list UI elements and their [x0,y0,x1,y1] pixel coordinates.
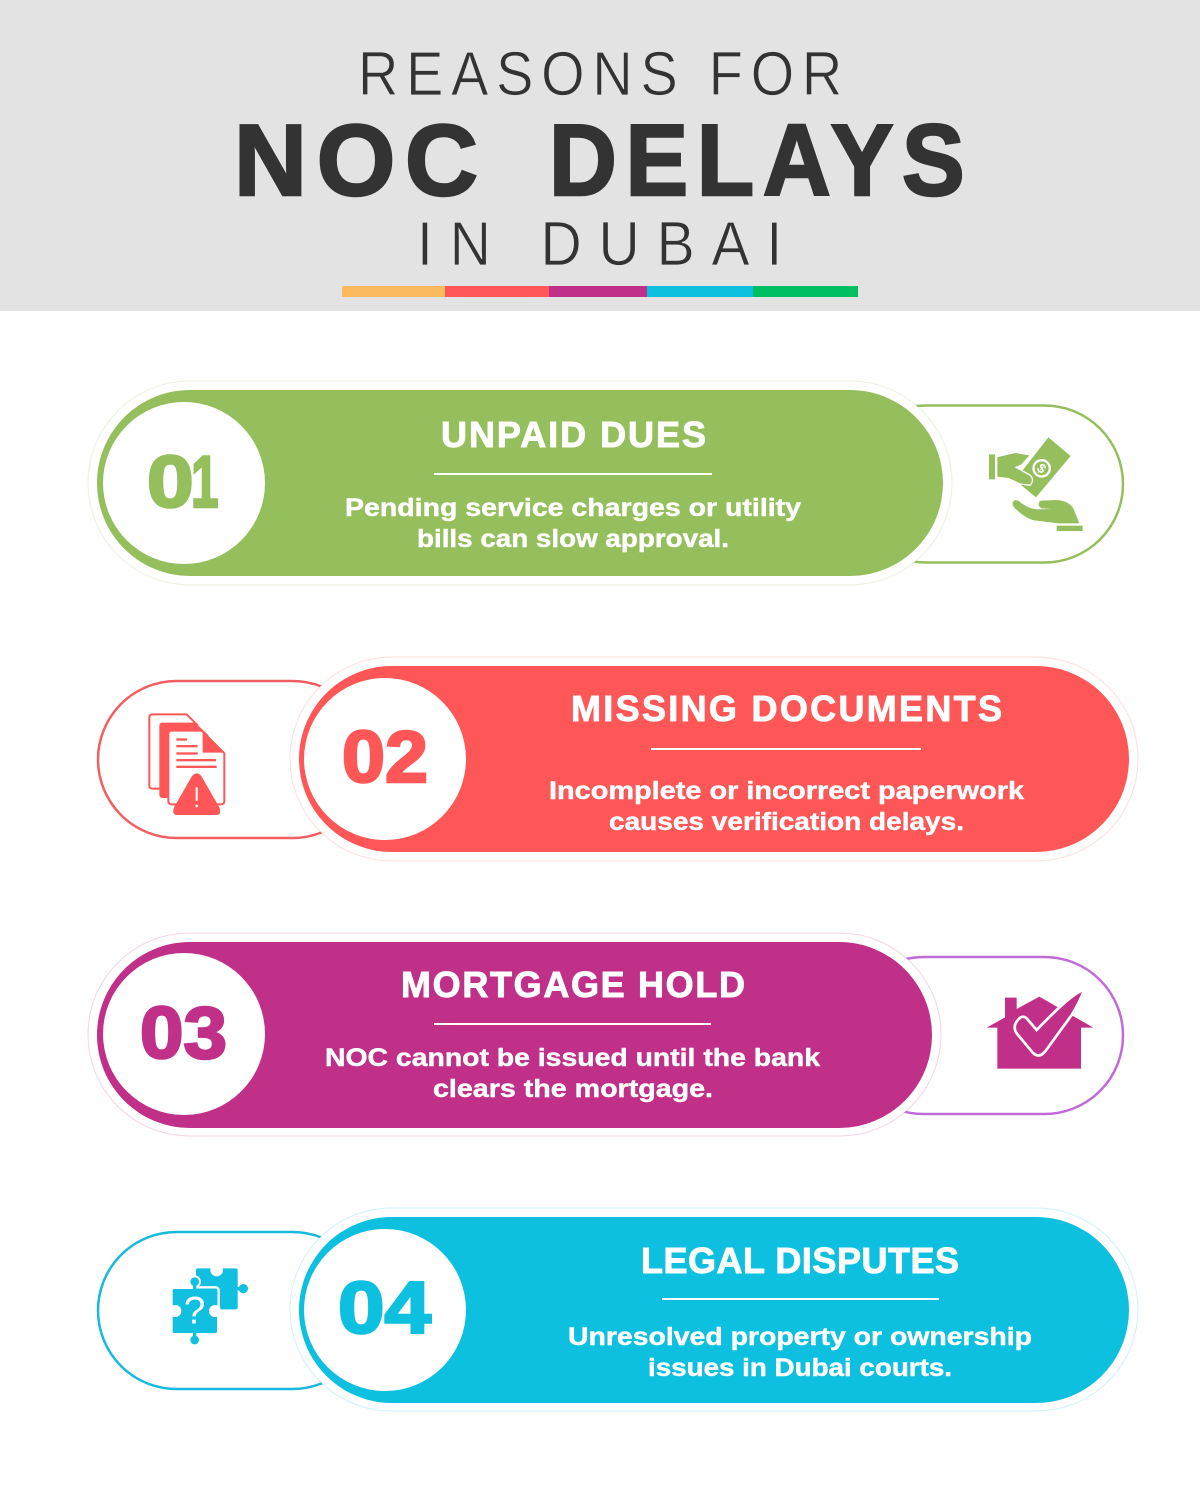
icon: hands exchanging money [989,437,1083,531]
description [345,494,801,553]
main pill [88,933,941,1136]
panel: unpaid dues [88,381,1123,585]
icon: hands exchanging money: $ [1034,460,1050,477]
icon pill outline [98,681,371,838]
panel: legal disputes [98,1208,1138,1411]
description: issues in Dubai courts. [648,1354,952,1382]
heading: MISSING DOCUMENTS [571,688,1002,729]
title: IN DUBAI [417,209,782,279]
number badge [304,678,466,840]
description: NOC cannot be issued until the bank [325,1044,820,1072]
icon: house with check mark [987,990,1093,1069]
number badge: 0 [147,441,194,523]
main pill [88,381,952,585]
heading: MORTGAGE HOLD [401,964,745,1005]
description: clears the mortgage. [433,1075,713,1103]
description: Unresolved property or ownership [568,1323,1032,1351]
number badge: 03 [140,993,227,1074]
icon: puzzle pieces with question mark: ? [184,1290,205,1333]
number badge: 02 [342,717,428,798]
icon pill outline [98,1232,371,1389]
panel: mortgage hold [88,933,1123,1136]
title [234,40,965,279]
colour bar [342,286,858,297]
main pill [290,657,1138,861]
title: REASONS FOR [358,40,842,109]
icon pill outline [845,957,1123,1114]
description [549,777,1024,836]
header band [0,0,1200,311]
heading: LEGAL DISPUTES [641,1240,959,1281]
number badge [103,402,265,564]
description: Incomplete or incorrect paperwork [549,777,1024,805]
number badge: 1 [191,442,219,523]
heading: UNPAID DUES [441,414,706,455]
description [568,1323,1032,1382]
main pill [290,1208,1138,1411]
number badge [103,953,265,1115]
panel: missing documents [98,657,1138,861]
title: DELAYS [549,104,965,217]
icon pill outline [847,406,1123,562]
description: causes verification delays. [609,808,964,836]
icon: documents with warning [149,714,224,815]
description: Pending service charges or utility [345,494,801,522]
description: bills can slow approval. [417,525,729,553]
title: NOC [234,105,478,217]
icon: puzzle pieces with question mark [169,1264,248,1344]
description [325,1044,820,1103]
number badge [304,1229,466,1391]
number badge: 04 [338,1268,431,1349]
